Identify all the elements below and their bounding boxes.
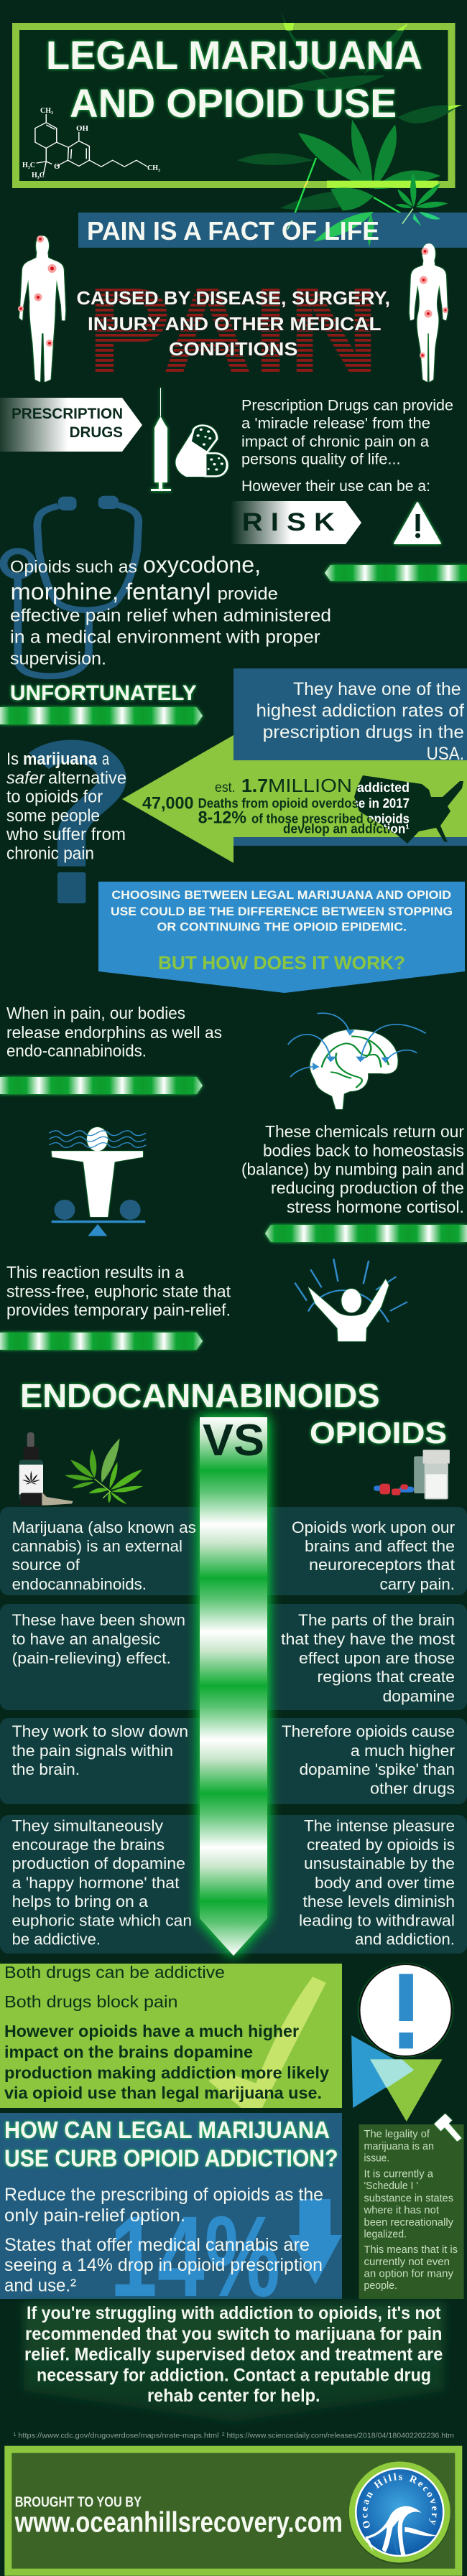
- text: opioids: oxycodone,: [143, 552, 261, 578]
- panel: both drugs: impact on the brains dopamine: [4, 2043, 253, 2061]
- text: website: www.oceanhillsrecovery.com: [14, 2507, 343, 2539]
- panel: legality of marijuana: The legality of: [364, 2128, 430, 2140]
- panel: footer: [8, 2450, 458, 2572]
- panel: curbing opioid addiction: [0, 2113, 342, 2320]
- banner: pain is a fact of life: [78, 209, 467, 248]
- panel: both drugs: However opioids have a much higher: [4, 2022, 299, 2040]
- text: endocannabinoids column: euphoric state which can: [12, 1912, 192, 1930]
- text: opioids: in a medical environment with proper: [10, 627, 320, 648]
- text: opioids column: dopamine: [383, 1687, 455, 1705]
- icon: THC molecule: H₃C: [22, 162, 35, 169]
- text: opioids: provide: [218, 584, 278, 604]
- panel: addiction rates: highest addiction rates of: [256, 701, 464, 721]
- arrow bar: [325, 565, 467, 581]
- banner: pain is a fact of life: PAIN IS A FACT OF LIFE: [87, 216, 379, 246]
- panel: legality of marijuana: people.: [364, 2279, 397, 2292]
- panel: how does it work: BUT HOW DOES IT WORK?: [158, 952, 405, 974]
- text: opioids: [10, 552, 331, 669]
- text: closing message: relief. Medically supervised detox and treatment are: [24, 2345, 443, 2365]
- text: endocannabinoids column: They simultaneously: [12, 1817, 163, 1835]
- icon: THC molecule: CH₃: [147, 164, 160, 172]
- icon: stethoscope: [4, 496, 139, 676]
- text: stats over map: addicted: [357, 780, 410, 795]
- stat: addiction figures: develop an addiction¹: [283, 822, 410, 836]
- text: opioids: effective pain relief when administered: [10, 606, 331, 626]
- text: opioids column: Therefore opioids cause: [282, 1722, 455, 1740]
- text: is marijuana safer: safer: [6, 769, 45, 788]
- heading: caused by: CONDITIONS: [169, 338, 297, 360]
- icon: capsules: [175, 426, 228, 477]
- text: opioids column: [281, 1518, 455, 1949]
- panel: addiction rates: They have one of the: [293, 679, 461, 699]
- text: is marijuana safer: to opioids for: [6, 788, 103, 807]
- text: opioids column: neuroreceptors that: [309, 1556, 455, 1574]
- label arrow: prescription drugs: [0, 398, 142, 452]
- text: reduce the prescribing: seeing a 14% drop in opioid prescription: [4, 2255, 323, 2275]
- text: endocannabinoids column: helps to bring on a: [12, 1893, 149, 1910]
- logo: Ocean Hills Recovery: Ocean Hills Recovery: [362, 2473, 437, 2529]
- text: endocannabinoids column: These have been shown: [12, 1611, 185, 1629]
- panel: legality of marijuana: It is currently a: [364, 2168, 434, 2180]
- text: chemicals return: reducing production of the: [271, 1179, 464, 1198]
- text: prescription drugs description: persons quality of life...: [241, 452, 401, 468]
- text: endocannabinoids column: Marijuana (also known as: [12, 1518, 196, 1536]
- icon: THC molecule: CH₃: [40, 107, 53, 115]
- heading: how can legal marijuana: [4, 2117, 338, 2172]
- label arrow: risk: [231, 501, 361, 544]
- text: endocannabinoids column: the brain.: [12, 1760, 80, 1778]
- label arrow: prescription drugs: PRESCRIPTION: [11, 406, 123, 422]
- heading: caused by: [76, 287, 390, 360]
- text: closing message: necessary for addiction. Contact a reputable drug: [37, 2366, 431, 2386]
- icon: brain: [288, 1013, 426, 1109]
- panel: legality of marijuana: where it has not: [364, 2204, 440, 2216]
- stat: addiction figures: [142, 775, 410, 836]
- title: AND OPIOID USE: [70, 80, 397, 126]
- text: chemicals return: (balance) by numbing pain and: [241, 1160, 464, 1179]
- text: is marijuana safer: who suffer from: [6, 825, 126, 844]
- text: endocannabinoids column: [12, 1518, 196, 1949]
- text: closing message: [24, 2303, 443, 2406]
- text: is marijuana safer: chronic pain: [6, 844, 94, 864]
- stat: addiction figures: 1.7: [241, 775, 268, 796]
- arrow bar: [0, 1077, 203, 1094]
- text: opioids column: created by opioids is: [307, 1836, 455, 1854]
- panel: addiction rates: [234, 668, 467, 846]
- text: opioids: supervision.: [10, 649, 106, 669]
- panel: comparison row 3 background: [0, 1718, 467, 1804]
- text: closing message: rehab center for help.: [147, 2386, 320, 2406]
- panel: legality of marijuana: an option for many: [364, 2268, 453, 2280]
- text: endocannabinoids column: source of: [12, 1556, 80, 1574]
- text: opioids column: other drugs: [370, 1780, 455, 1798]
- text: opioids column: unsustainable by the: [304, 1854, 455, 1872]
- icon: male body with pain points: [18, 235, 65, 382]
- panel: both drugs: Both drugs block pain: [4, 1992, 178, 2011]
- text: prescription drugs description: Prescription Drugs can provide: [241, 398, 453, 414]
- text: endocannabinoids column: the pain signals within: [12, 1742, 173, 1760]
- stat: addiction figures: 8-12%: [198, 808, 246, 828]
- panel: both drugs: via opioid use than legal marijuana use.: [4, 2083, 322, 2102]
- text: opioids column: Opioids work upon our: [292, 1518, 455, 1536]
- text: endocannabinoids column: to have an analgesic: [12, 1630, 160, 1648]
- icon: dropper bottle: [19, 1432, 73, 1506]
- heading: unfortunately: UNFORTUNATELY: [10, 681, 197, 705]
- text: sources: [14, 2432, 454, 2440]
- panel: legality of marijuana: marijuana is an: [364, 2140, 434, 2152]
- text: is marijuana safer: some people: [6, 806, 100, 826]
- text: reaction results: provides temporary pain-relief.: [6, 1301, 231, 1320]
- text: endocannabinoids column: (pain-relieving) effect.: [12, 1649, 171, 1667]
- icon: euphoric person: [295, 1259, 407, 1341]
- stat: addiction figures: est.: [215, 780, 236, 795]
- heading: how can legal marijuana: HOW CAN LEGAL MARIJUANA: [4, 2117, 330, 2143]
- text: endocannabinoids column: encourage the brains: [12, 1836, 165, 1854]
- text: stats over map: of those prescribed opioids: [251, 812, 410, 826]
- text: endocannabinoids column: be addictive.: [12, 1931, 101, 1949]
- text: chemicals return: stress hormone cortisol.: [287, 1198, 464, 1216]
- title frame: [16, 27, 451, 185]
- panel: how does it work: [98, 882, 465, 993]
- text: is marijuana safer: Is: [6, 750, 19, 769]
- text: is marijuana safer: a: [102, 750, 109, 769]
- heading: endocannabinoids: ENDOCANNABINOIDS: [20, 1377, 379, 1414]
- icon: syringe: [151, 388, 171, 491]
- big 14% figure: 14%: [110, 2192, 280, 2320]
- text: prescription drugs description: a 'miracle release' from the: [241, 416, 430, 432]
- striped word PAIN: PAIN: [87, 263, 379, 399]
- text: when in pain: When in pain, our bodies: [6, 1004, 185, 1022]
- panel: both drugs: [0, 1963, 342, 2108]
- panel: legality of marijuana: legalized.: [364, 2229, 407, 2241]
- text: reaction results: [6, 1263, 231, 1320]
- icon: gavel: [434, 2114, 461, 2142]
- arrow: statistics: [122, 735, 467, 863]
- icon: pill bottle and capsules: [374, 1450, 450, 1499]
- panel: legality of marijuana: 'Schedule I ': [364, 2180, 418, 2192]
- text: endocannabinoids column: endocannabinoids.: [12, 1575, 147, 1593]
- panel: both drugs: production making addiction more likely: [4, 2063, 329, 2082]
- text: chemicals return: bodies back to homeostasis: [263, 1142, 464, 1160]
- text: opioids column: brains and affect the: [305, 1537, 455, 1555]
- text: reduce the prescribing: [4, 2185, 323, 2296]
- heading: VS: VS: [203, 1416, 264, 1465]
- panel: closing message background: [24, 2303, 444, 2422]
- icon: warning triangle: [394, 503, 440, 543]
- text: when in pain: [6, 1004, 222, 1060]
- panel: legality of marijuana: This means that it is: [364, 2244, 458, 2256]
- icon: balance figure: [49, 1127, 146, 1236]
- heading: caused by: CAUSED BY DISEASE, SURGERY,: [76, 287, 390, 309]
- icon: down arrow: [289, 2199, 342, 2285]
- text: opioids column: these levels diminish: [303, 1893, 455, 1910]
- arrow: VS column: [200, 1417, 267, 1956]
- text: stats over map: [355, 783, 410, 833]
- icon: exclamation circle with triangles: [351, 1964, 452, 2122]
- text: opioids column: that they have the most: [281, 1630, 455, 1648]
- text: prescription drugs description: [241, 398, 453, 495]
- text: reaction results: This reaction results in a: [6, 1263, 184, 1282]
- panel: comparison row 4 background: [0, 1815, 467, 1954]
- text: endocannabinoids column: production of dopamine: [12, 1854, 185, 1872]
- text: opioids: Opioids such as: [10, 558, 137, 577]
- text: when in pain: endo-cannabinoids.: [6, 1042, 147, 1060]
- text: reduce the prescribing: and use.²: [4, 2276, 76, 2296]
- stat: addiction figures: Deaths from opioid overdose in 2017: [198, 796, 410, 811]
- text: opioids column: dopamine 'spike' than: [300, 1760, 455, 1778]
- panel: legality of marijuana: issue.: [364, 2152, 389, 2165]
- stat: addiction figures: MILLION: [268, 775, 352, 796]
- text: opioids column: and addiction.: [355, 1931, 455, 1949]
- text: reduce the prescribing: only pain-relief option.: [4, 2206, 185, 2226]
- text: opioids column: The intense pleasure: [304, 1817, 455, 1835]
- text: endocannabinoids column: They work to slow down: [12, 1722, 188, 1740]
- text: stats over map: develop an addiction¹: [283, 822, 410, 836]
- icon: THC molecule: OH: [76, 124, 89, 133]
- heading: caused by: INJURY AND OTHER MEDICAL: [88, 313, 382, 335]
- text: closing message: recommended that you switch to marijuana for pain: [25, 2324, 443, 2344]
- text: opioids: morphine, fentanyl: [10, 579, 211, 605]
- text: when in pain: release endorphins as well as: [6, 1023, 222, 1042]
- label arrow: prescription drugs: DRUGS: [70, 424, 123, 441]
- panel: addiction rates: prescription drugs in the: [263, 722, 464, 742]
- cannabis leaves decoration: [237, 9, 462, 224]
- panel: how does it work: CHOOSING BETWEEN LEGAL MARIJUANA AND OPIOID: [111, 888, 451, 902]
- text: brought to you by: BROUGHT TO YOU BY: [15, 2495, 142, 2511]
- text: opioids column: The parts of the brain: [298, 1611, 455, 1629]
- panel: comparison row 2 background: [0, 1604, 467, 1710]
- text: opioids column: regions that create: [318, 1668, 455, 1686]
- text: opioids column: carry pain.: [379, 1575, 455, 1593]
- stat: addiction figures: 47,000: [142, 794, 194, 813]
- text: reaction results: stress-free, euphoric state that: [6, 1282, 231, 1301]
- panel: how does it work: OR CONTINUING THE OPIOID EPIDEMIC.: [157, 920, 407, 934]
- icon: marijuana leaves: [65, 1438, 143, 1504]
- text: chemicals return: [241, 1122, 464, 1216]
- heading: opioids: OPIOIDS: [310, 1416, 447, 1450]
- arrow bar: [0, 1333, 203, 1350]
- panel: how does it work: USE COULD BE THE DIFFERENCE BETWEEN STOPPING: [111, 905, 453, 918]
- arrow bar: [265, 1225, 467, 1242]
- panel: both drugs: Both drugs can be addictive: [4, 1963, 225, 1982]
- title: LEGAL MARIJUANA: [46, 32, 422, 78]
- map: USA silhouette: [354, 775, 463, 844]
- panel: comparison row 1 background: [0, 1507, 467, 1595]
- panel: legality of marijuana: substance in states: [364, 2193, 453, 2205]
- title: [46, 32, 422, 126]
- heading: how can legal marijuana: USE CURB OPIOID ADDICTION?: [4, 2145, 338, 2172]
- icon: THC molecule: O: [54, 162, 60, 171]
- panel: legality of marijuana: been recreationally: [364, 2216, 453, 2229]
- text: opioids column: body and over time: [315, 1874, 455, 1892]
- text: is marijuana safer: marijuana: [23, 750, 98, 769]
- text: opioids column: effect upon are those: [299, 1649, 455, 1667]
- panel: legality of marijuana: currently not even: [364, 2256, 450, 2268]
- text: closing message: If you're struggling with addiction to opioids, it's not: [27, 2303, 441, 2323]
- text: endocannabinoids column: a 'happy hormone' that: [12, 1874, 179, 1892]
- text: chemicals return: These chemicals return our: [265, 1122, 464, 1141]
- stat: addiction figures: of those prescribed opioids: [251, 812, 410, 826]
- icon: question mark: [39, 751, 112, 903]
- text: endocannabinoids column: cannabis) is an external: [12, 1537, 182, 1555]
- text: sources: ¹ https://www.cdc.gov/drugoverdose/maps/nrate-maps.html: [14, 2432, 219, 2440]
- logo: Ocean Hills Recovery: [348, 2461, 451, 2565]
- icon: THC molecule: [22, 107, 160, 179]
- text: sources: ² https://www.sciencedaily.com/releases/2018/04/180402202236.htm: [222, 2432, 454, 2440]
- text: prescription drugs description: impact of chronic pain on a: [241, 434, 429, 450]
- text: reduce the prescribing: States that offer medical cannabis are: [4, 2235, 310, 2255]
- icon: female body with pain points: [410, 243, 448, 382]
- icon: THC molecule: H₃C: [32, 172, 45, 179]
- text: prescription drugs description: However their use can be a:: [241, 478, 430, 495]
- text: is marijuana safer: alternative: [48, 769, 126, 788]
- text: reduce the prescribing: Reduce the prescribing of opioids as the: [4, 2185, 323, 2205]
- text: stats over map: Deaths from opioid overdose in 2017: [198, 796, 410, 811]
- panel: legality of marijuana: [359, 2124, 464, 2299]
- text: opioids column: leading to withdrawal: [299, 1912, 455, 1930]
- text: opioids column: a much higher: [351, 1742, 455, 1760]
- label arrow: risk: R I S K: [242, 508, 335, 536]
- arrow bar: [0, 707, 203, 724]
- text: is marijuana safer: [6, 750, 126, 864]
